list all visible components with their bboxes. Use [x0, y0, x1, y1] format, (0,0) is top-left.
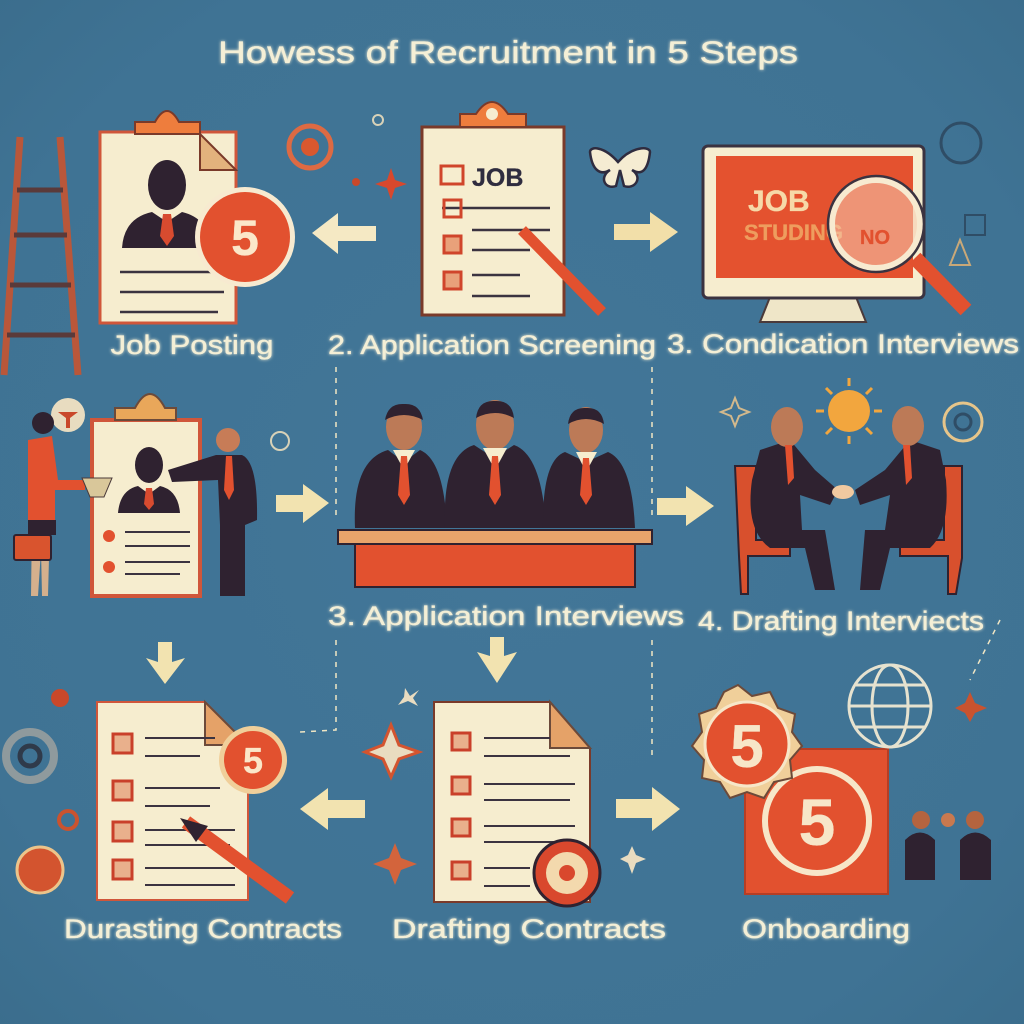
label: durasting contracts: Durasting Contracts: [64, 914, 342, 944]
label: application screening: 2. Application Screening: [328, 330, 656, 360]
people: [905, 811, 991, 880]
arrow: left: [312, 213, 376, 254]
panel: onboarding badge: [692, 665, 991, 894]
woman figure: [14, 412, 112, 596]
panel: checklist document with pen: [97, 702, 290, 900]
panel: onboarding badge: 5: [799, 785, 835, 859]
icon: gear badge: [692, 685, 802, 798]
panel: three interviewers at desk: [338, 400, 652, 587]
icon: gear badge: 5: [730, 713, 764, 780]
panel: job posting clipboard: [100, 111, 295, 323]
label: drafting contracts: Drafting Contracts: [392, 914, 666, 944]
label: job posting: Job Posting: [110, 330, 274, 360]
decorative icons: [6, 115, 987, 893]
icon: number 5 seal: [219, 726, 287, 794]
label: drafting interviects: 4. Drafting Interviects: [698, 606, 984, 636]
label: onboarding: Onboarding: [742, 914, 910, 944]
icon: butterfly: [590, 148, 650, 187]
icon: sun: [816, 378, 882, 444]
person 2: [445, 400, 546, 528]
chairs: [735, 466, 790, 594]
arrow: down: [146, 642, 185, 684]
desk: [338, 530, 652, 544]
panel: monitor: JOB: [748, 185, 810, 218]
person 3: [543, 407, 635, 528]
person 1: [355, 404, 447, 528]
arrow: down: [477, 637, 517, 683]
panel: drafting document: [434, 702, 600, 906]
arrow: right: [616, 787, 680, 831]
icon: number 5 badge: [195, 187, 295, 287]
connector lines: [300, 367, 1000, 760]
icon: seal: [534, 840, 600, 906]
arrow: right: [614, 212, 678, 252]
arrow: left: [300, 788, 365, 830]
icon: magnifier: NO: [860, 227, 890, 249]
panel: job clipboard: JOB: [472, 164, 523, 192]
man left: [750, 440, 838, 590]
icon: globe: [849, 665, 931, 747]
panel: monitor: [703, 146, 966, 322]
panel: monitor: STUDING: [744, 220, 843, 245]
man right: [855, 440, 947, 590]
title: Howess of Recruitment in 5 Steps: [218, 34, 798, 70]
arrow: right: [657, 486, 714, 526]
panel: step with two people and clipboard: [14, 394, 257, 596]
label: condication interviews: 3. Condication Interviews: [667, 329, 1019, 359]
label: application interviews: 3. Application Interviews: [328, 601, 684, 631]
icon: ladder: [4, 137, 78, 375]
arrow: right: [276, 484, 329, 523]
panel: handshake: [735, 378, 962, 594]
icon: magnifier: [828, 176, 966, 310]
man figure: [168, 428, 257, 596]
panel: job clipboard: [422, 102, 602, 315]
icon: number 5 seal: 5: [243, 740, 263, 781]
icon: number 5 badge: 5: [231, 210, 259, 266]
